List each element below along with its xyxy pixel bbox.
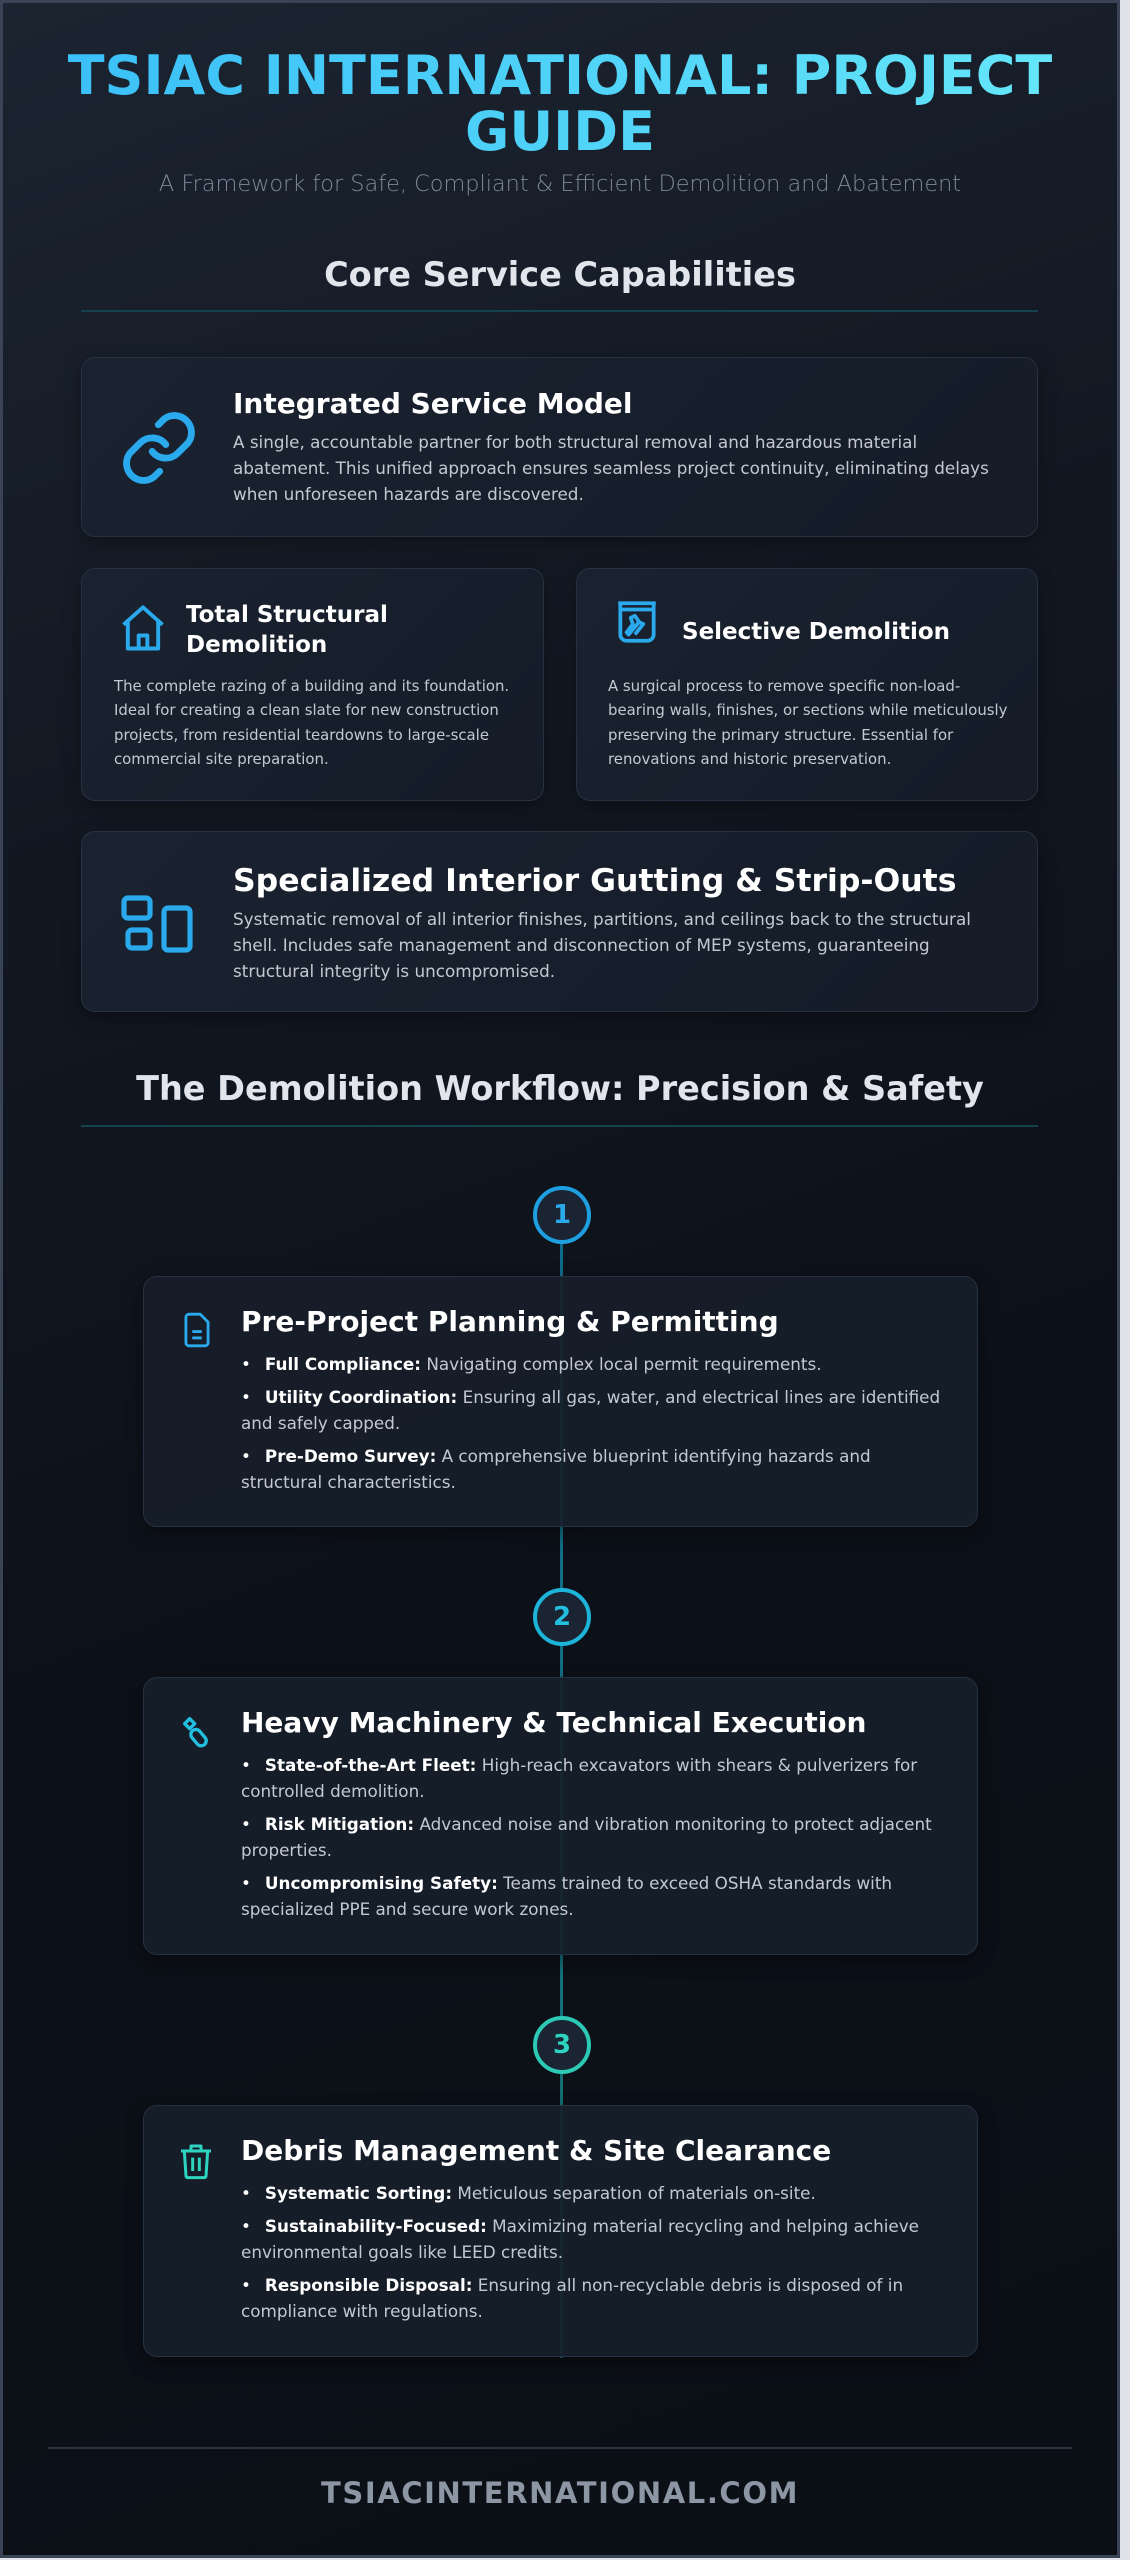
icon: layout blocks bbox=[121, 895, 193, 953]
card body: The complete razing of a building and its foundation. bbox=[114, 677, 509, 695]
footer: TSIACINTERNATIONAL.COM bbox=[321, 2476, 799, 2510]
step 2 card bbox=[143, 1677, 978, 1955]
icon: document bbox=[184, 1312, 210, 1348]
card body: structural integrity is uncompromised. bbox=[233, 961, 555, 981]
step 2 marker: 2 bbox=[553, 1602, 571, 1632]
step 3 marker: 3 bbox=[553, 2030, 571, 2060]
step 1 card bbox=[143, 1276, 978, 1527]
step title: Pre-Project Planning & Permitting bbox=[241, 1305, 779, 1338]
card body: shell. Includes safe management and disconnection of MEP systems, guaranteeing bbox=[233, 935, 930, 955]
bullets: State-of-the-Art Fleet: High-reach excavators with shears & pulverizers for bbox=[265, 1755, 917, 1775]
subtitle: A Framework for Safe, Compliant & Efficient Demolition and Abatement bbox=[159, 171, 961, 197]
icon: trash bbox=[181, 2144, 211, 2180]
heading: core service capabilities: Core Service Capabilities bbox=[324, 255, 796, 294]
panel: total structural demolition bbox=[81, 568, 544, 801]
bullets: Sustainability-Focused: Maximizing material recycling and helping achieve bbox=[265, 2216, 919, 2236]
step 2 marker bbox=[533, 1588, 591, 1646]
step 3 marker bbox=[533, 2016, 591, 2074]
card body: Systematic removal of all interior finishes, partitions, and ceilings back to the structural bbox=[233, 909, 971, 929]
bullets: Systematic Sorting: Meticulous separation of materials on-site. bbox=[265, 2183, 816, 2203]
card body: bearing walls, finishes, or sections while meticulously bbox=[608, 701, 1008, 719]
card body bbox=[114, 677, 509, 768]
bullets: specialized PPE and secure work zones. bbox=[241, 1899, 574, 1919]
bullets: Responsible Disposal: Ensuring all non-recyclable debris is disposed of in bbox=[265, 2275, 903, 2295]
bullets: structural characteristics. bbox=[241, 1472, 456, 1492]
icon: link bbox=[123, 412, 195, 484]
card body: preserving the primary structure. Essential for bbox=[608, 726, 953, 744]
card body: commercial site preparation. bbox=[114, 750, 329, 768]
timeline line bbox=[560, 1243, 563, 2358]
panel: interior gutting bbox=[81, 831, 1038, 1012]
heading: workflow: The Demolition Workflow: Precision & Safety bbox=[136, 1069, 984, 1108]
title: GUIDE bbox=[465, 100, 655, 163]
step title: Debris Management & Site Clearance bbox=[241, 2134, 831, 2167]
step title: Heavy Machinery & Technical Execution bbox=[241, 1706, 866, 1739]
card body bbox=[233, 432, 989, 504]
panel: selective demolition bbox=[576, 568, 1038, 801]
bullets bbox=[241, 2183, 919, 2321]
bullets: Risk Mitigation: Advanced noise and vibration monitoring to protect adjacent bbox=[265, 1814, 932, 1834]
card body: A single, accountable partner for both structural removal and hazardous material bbox=[233, 432, 917, 452]
card body: renovations and historic preservation. bbox=[608, 750, 891, 768]
step 3 card bbox=[143, 2105, 978, 2357]
step 1 marker: 1 bbox=[553, 1200, 571, 1230]
card body: abatement. This unified approach ensures seamless project continuity, eliminating delays bbox=[233, 458, 989, 478]
card body: A surgical process to remove specific non-load- bbox=[608, 677, 960, 695]
title bbox=[3, 48, 1117, 160]
bullets: Pre-Demo Survey: A comprehensive blueprint identifying hazards and bbox=[265, 1446, 871, 1466]
panel: integrated service model bbox=[81, 357, 1038, 537]
icon: house bbox=[122, 605, 164, 650]
card body: when unforeseen hazards are discovered. bbox=[233, 484, 584, 504]
title: TSIAC INTERNATIONAL: PROJECT bbox=[68, 44, 1052, 107]
card body bbox=[233, 909, 971, 981]
bullets: Full Compliance: Navigating complex local permit requirements. bbox=[265, 1354, 822, 1374]
card body bbox=[608, 677, 1008, 768]
bullets: properties. bbox=[241, 1840, 332, 1860]
card body: Ideal for creating a clean slate for new construction bbox=[114, 701, 499, 719]
bullets bbox=[241, 1354, 940, 1492]
bullets: Uncompromising Safety: Teams trained to exceed OSHA standards with bbox=[265, 1873, 892, 1893]
card title: Selective Demolition bbox=[682, 619, 950, 645]
bullets bbox=[241, 1755, 932, 1919]
bullets: and safely capped. bbox=[241, 1413, 400, 1433]
bullets: compliance with regulations. bbox=[241, 2301, 483, 2321]
card title: Total Structural bbox=[186, 602, 388, 628]
bullets: Utility Coordination: Ensuring all gas, water, and electrical lines are identified bbox=[265, 1387, 940, 1407]
bullets: controlled demolition. bbox=[241, 1781, 425, 1801]
step 1 marker bbox=[533, 1186, 591, 1244]
card title: Integrated Service Model bbox=[233, 387, 633, 420]
card body: projects, from residential teardowns to large-scale bbox=[114, 726, 489, 744]
icon: selective tool bbox=[618, 601, 656, 643]
card title bbox=[186, 602, 388, 658]
card title: Specialized Interior Gutting & Strip-Outs bbox=[233, 863, 956, 899]
bullets: environmental goals like LEED credits. bbox=[241, 2242, 563, 2262]
card title: Demolition bbox=[186, 632, 327, 658]
icon: hammer bbox=[182, 1716, 208, 1748]
